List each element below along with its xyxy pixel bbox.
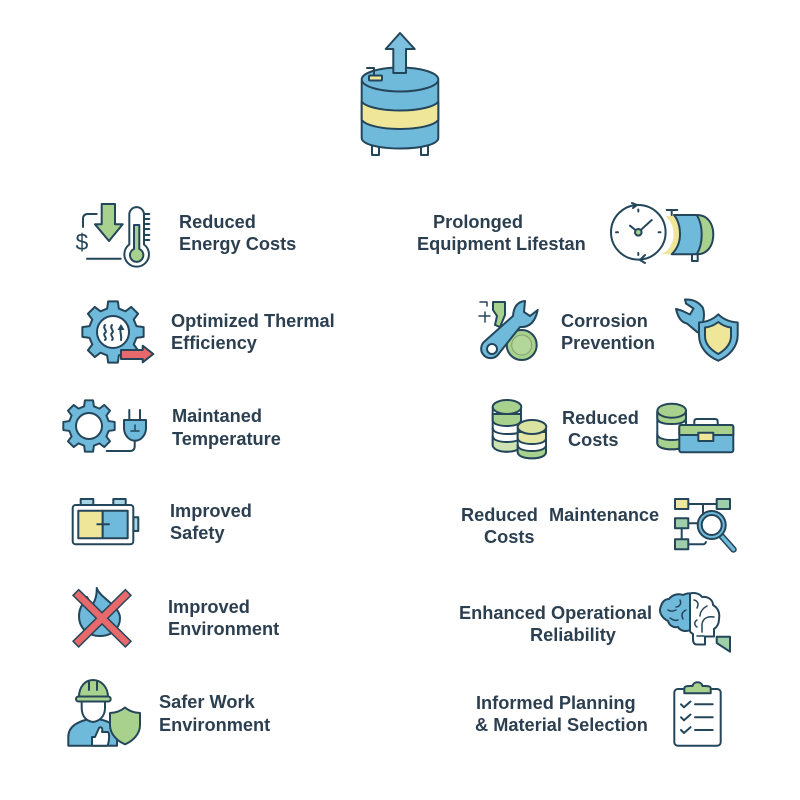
text: reduced maintenance costs: Maintenance	[549, 505, 659, 525]
icon: worker with helmet and shield	[68, 680, 140, 746]
item: reduced maintenance costs	[461, 499, 734, 550]
icon: gear with heat waves and red arrow	[82, 301, 153, 363]
text: reduced costs: Reduced	[562, 408, 639, 428]
text: enhanced operational reliability: Reliability	[530, 625, 617, 645]
icon: clipboard checklist	[674, 682, 721, 746]
icon: wrench and shield	[676, 299, 738, 361]
text: enhanced operational reliability: Enhanced Operational	[459, 603, 652, 623]
text: corrosion prevention: Prevention	[561, 333, 655, 353]
icon: gear and plug	[63, 400, 146, 452]
text: optimized thermal efficiency: Optimized Thermal	[171, 311, 335, 331]
item: corrosion prevention	[479, 299, 738, 361]
item: prolonged equipment lifespan	[417, 203, 713, 263]
text: safer work environment: Environment	[159, 715, 270, 735]
icon: wrench, gear ring and circuit	[479, 301, 538, 360]
item: reduced energy costs	[76, 204, 296, 267]
item: optimized thermal efficiency	[82, 301, 335, 363]
icon: clock and horizontal tank	[611, 203, 713, 263]
text: improved safety: Safety	[170, 523, 225, 543]
text: prolonged equipment lifespan: Equipment Lifestan	[417, 234, 586, 254]
text: improved environment: Environment	[168, 619, 279, 639]
text: corrosion prevention: Corrosion	[561, 311, 648, 331]
item: safer work environment	[68, 680, 270, 746]
icon: battery	[73, 499, 138, 544]
text: reduced costs: Costs	[568, 430, 619, 450]
text: maintained temperature: Maintaned	[172, 406, 262, 426]
item: enhanced operational reliability	[459, 593, 730, 652]
item: improved safety	[73, 499, 252, 544]
text: safer work environment: Safer Work	[159, 692, 256, 712]
icon: down arrow, dollar and thermometer	[76, 204, 149, 267]
icon: crossed-out flame	[79, 588, 125, 641]
text: reduced maintenance costs: Costs	[484, 527, 535, 547]
text: reduced energy costs: Reduced	[179, 212, 256, 232]
item: informed planning and material selection	[475, 682, 721, 746]
icon: brain	[660, 593, 730, 652]
icon: insulated tank with up arrow	[362, 33, 438, 155]
text: maintained temperature: Temperature	[172, 429, 281, 449]
item: reduced costs	[493, 400, 733, 458]
text: prolonged equipment lifespan: Prolonged	[433, 212, 523, 232]
text: reduced maintenance costs: Reduced	[461, 505, 538, 525]
item: maintained temperature	[63, 400, 281, 452]
item: improved environment	[79, 588, 279, 641]
text: improved safety: Improved	[170, 501, 252, 521]
text: reduced energy costs: Energy Costs	[179, 234, 296, 254]
text: informed planning and material selection: & Material Selection	[475, 715, 648, 735]
icon: down arrow, dollar and thermometer: $	[76, 229, 88, 255]
icon: coins and toolbox	[657, 404, 733, 452]
text: optimized thermal efficiency: Efficiency	[171, 333, 258, 353]
text: informed planning and material selection: Informed Planning	[476, 693, 636, 713]
icon: flow chart with magnifier	[675, 499, 734, 550]
icon: coin stacks	[493, 400, 546, 458]
text: improved environment: Improved	[168, 597, 250, 617]
